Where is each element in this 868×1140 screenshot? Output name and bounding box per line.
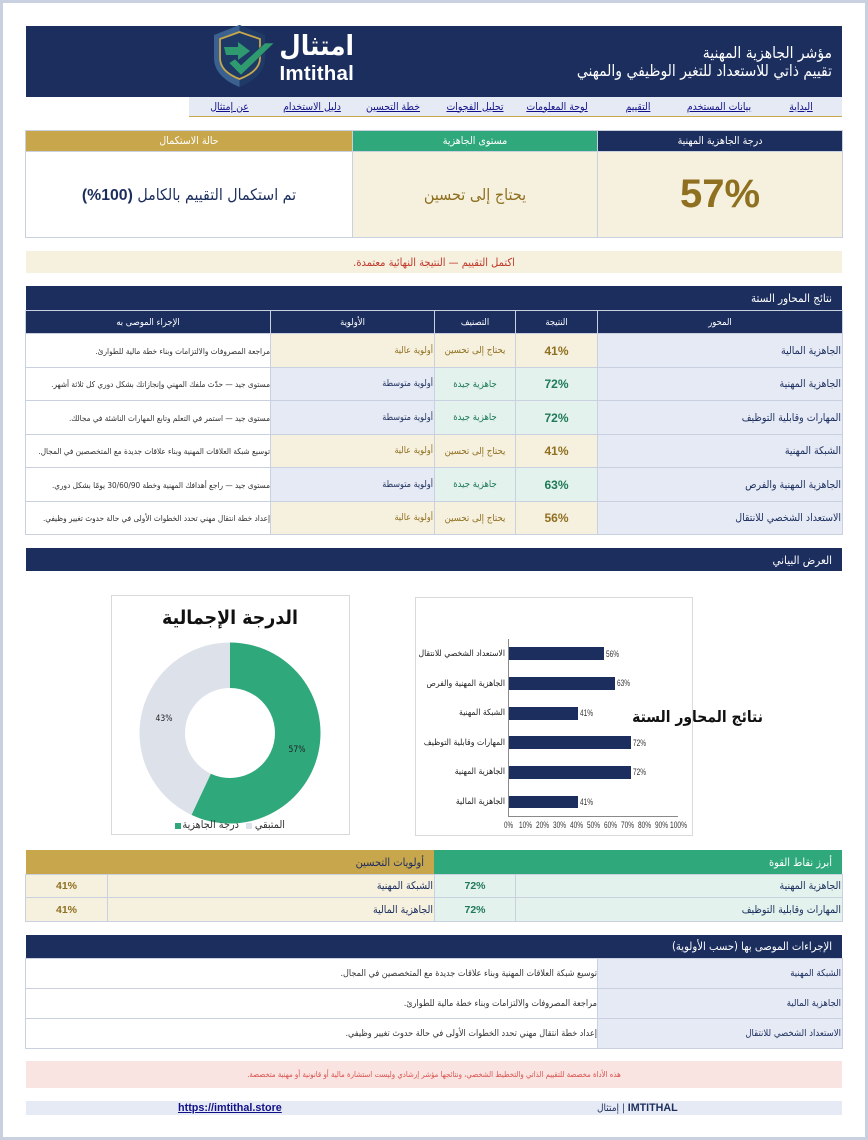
chart: six axes bar chart: 90% <box>655 820 668 830</box>
chart: six axes bar chart: 63% <box>617 678 630 688</box>
chart: six axes bar chart: 20% <box>536 820 549 830</box>
panel: improvement priorities heading: أولويات التحسين <box>356 856 424 868</box>
table: six axes results: 41% <box>544 344 569 358</box>
chart: six axes bar chart: الاستعداد الشخصي للانتقال <box>418 649 505 659</box>
table: six axes results: مراجعة المصروفات والالتزامات وبناء خطة مالية للطوارئ. <box>95 346 270 356</box>
table: six axes results: التصنيف <box>461 316 489 328</box>
panel: score summary cards: يحتاج إلى تحسين <box>424 185 526 204</box>
panel: score summary cards: مستوى الجاهزية <box>443 135 507 147</box>
navigation bar <box>189 97 842 117</box>
navigation bar: التقييم <box>626 100 650 112</box>
table: six axes results: 56% <box>544 511 569 525</box>
panel: improvement priorities heading <box>26 850 434 874</box>
heading: six axes results <box>26 286 842 310</box>
table: strengths and priorities: الجاهزية المالية <box>373 904 433 916</box>
table: six axes results: الجاهزية المالية <box>781 344 841 356</box>
heading: recommended actions <box>26 935 842 958</box>
chart: six axes bar chart: 70% <box>621 820 634 830</box>
chart: six axes bar chart: الجاهزية المهنية والفرص <box>426 679 505 689</box>
chart: six axes bar chart: الجاهزية المالية <box>456 797 505 807</box>
navigation bar: لوحة المعلومات <box>526 100 588 112</box>
table: six axes results: أولوية عالية <box>394 346 433 356</box>
table: strengths and priorities: الشبكة المهنية <box>377 880 433 892</box>
title <box>577 44 832 80</box>
chart: six axes bar chart: 40% <box>570 820 583 830</box>
table: recommended actions <box>25 958 843 1049</box>
chart: overall score donut: درجة الجاهزية <box>182 818 239 831</box>
footer: https://imtithal.store <box>178 1102 282 1114</box>
chart: six axes bar chart: الشبكة المهنية <box>459 708 505 718</box>
chart: six axes bar chart: 30% <box>553 820 566 830</box>
chart: six axes bar chart: 72% <box>633 767 646 777</box>
table: six axes results: أولوية عالية <box>394 446 433 456</box>
table: six axes results: يحتاج إلى تحسين <box>445 512 505 524</box>
table: strengths and priorities: 41% <box>56 904 77 916</box>
table: strengths and priorities <box>25 874 843 922</box>
table: six axes results: 63% <box>544 478 569 492</box>
navigation bar: خطة التحسين <box>366 100 420 112</box>
chart: overall score donut: الدرجة الإجمالية <box>162 606 298 629</box>
table: recommended actions: مراجعة المصروفات والالتزامات وبناء خطة مالية للطوارئ. <box>404 998 597 1008</box>
table: six axes results: 41% <box>544 444 569 458</box>
table: six axes results: الأولوية <box>340 316 365 328</box>
table: six axes results: مستوى جيد — حدّث ملفك المهني وإنجازاتك بشكل دوري كل ثلاثة أشهر. <box>51 379 270 389</box>
table: six axes results: أولوية متوسطة <box>382 480 433 490</box>
notice: assessment complete: اكتمل التقييم — النتيجة النهائية معتمدة. <box>353 256 515 268</box>
table: six axes results: المهارات وقابلية التوظيف <box>742 412 841 424</box>
table: six axes results: المحور <box>708 316 732 328</box>
heading: chart view: العرض البياني <box>773 552 832 566</box>
table: six axes results: يحتاج إلى تحسين <box>445 345 505 356</box>
table: recommended actions: توسيع شبكة العلاقات المهنية وبناء علاقات جديدة مع المتخصصين في المجال. <box>340 968 597 978</box>
table: six axes results: 72% <box>544 377 569 391</box>
table: recommended actions: الاستعداد الشخصي للانتقال <box>745 1028 841 1039</box>
disclaimer <box>26 1061 842 1088</box>
table: six axes results: جاهزية جيدة <box>453 378 497 390</box>
panel: score summary cards <box>25 130 843 238</box>
table: six axes results: إعداد خطة انتقال مهني تحدد الخطوات الأولى في حالة حدوث تغيير وظيفي. <box>43 513 270 523</box>
chart: six axes bar chart: 41% <box>580 708 593 718</box>
table: strengths and priorities: المهارات وقابلية التوظيف <box>742 904 841 916</box>
chart: six axes bar chart: الجاهزية المهنية <box>455 767 505 777</box>
table: recommended actions: الشبكة المهنية <box>790 968 841 979</box>
table: six axes results: الاستعداد الشخصي للانتقال <box>735 512 841 524</box>
panel: top strengths heading <box>434 850 842 874</box>
table: six axes results: توسيع شبكة العلاقات المهنية وبناء علاقات جديدة مع المتخصصين في المجال. <box>38 446 270 456</box>
table: strengths and priorities: 72% <box>464 904 486 916</box>
table: six axes results <box>25 310 843 535</box>
panel: score summary cards: درجة الجاهزية المهنية <box>678 135 762 147</box>
chart: six axes bar chart: 56% <box>606 649 619 659</box>
chart: six axes bar chart: 0% <box>504 820 513 830</box>
heading: six axes results: نتائج المحاور الستة <box>751 291 832 305</box>
table: six axes results: أولوية متوسطة <box>382 412 433 422</box>
chart: six axes bar chart: 60% <box>604 820 617 830</box>
table: six axes results: مستوى جيد — استمر في التعلم وتابع المهارات الناشئة في مجالك. <box>69 412 270 422</box>
navigation bar: بيانات المستخدم <box>687 100 751 112</box>
panel: score summary cards: تم استكمال التقييم بالكامل (100%) <box>82 184 296 204</box>
icon: shield logo <box>214 25 274 87</box>
table: six axes results: جاهزية جيدة <box>453 479 497 490</box>
table: six axes results: الجاهزية المهنية والفرص <box>745 478 841 490</box>
table: six axes results: 72% <box>544 410 569 424</box>
chart: overall score donut: المتبقي <box>255 818 285 831</box>
navigation bar: عن إمتثال <box>210 100 249 112</box>
table: strengths and priorities: 41% <box>56 880 77 892</box>
table: six axes results: الإجراء الموصى به <box>116 316 180 328</box>
chart: six axes bar chart: 100% <box>670 820 687 830</box>
chart: six axes bar chart: 50% <box>587 820 600 830</box>
table: six axes results: جاهزية جيدة <box>453 412 497 423</box>
chart: six axes bar chart: 10% <box>519 820 532 830</box>
chart: overall score donut: 43% <box>156 714 172 724</box>
chart: six axes bar chart <box>415 597 763 836</box>
panel: top strengths heading: أبرز نقاط القوة <box>769 856 832 868</box>
logo wordmark: امتثال <box>279 30 354 62</box>
footer <box>26 1101 842 1115</box>
chart: six axes bar chart: 80% <box>638 820 651 830</box>
chart: overall score donut: 57% <box>288 745 306 755</box>
panel: score summary cards: 57% <box>680 172 760 216</box>
heading: chart view <box>26 548 842 571</box>
heading: recommended actions: الإجراءات الموصى بها (حسب الأولوية) <box>672 940 832 953</box>
logo wordmark: Imtithal <box>280 62 354 85</box>
notice: assessment complete <box>26 251 842 273</box>
table: six axes results: الشبكة المهنية <box>785 445 841 457</box>
disclaimer: هذه الأداة مخصصة للتقييم الذاتي والتخطيط الشخصي، ونتائجها مؤشر إرشادي وليست استشارة مالية أو قانونية أو مهنية متخصصة. <box>247 1070 621 1079</box>
chart: six axes bar chart: المهارات وقابلية التوظيف <box>424 738 505 748</box>
navigation bar: البداية <box>789 100 813 112</box>
table: six axes results: أولوية متوسطة <box>382 379 433 389</box>
footer: IMTITHAL <box>628 1102 678 1114</box>
chart: six axes bar chart: نتائج المحاور الستة <box>632 708 763 726</box>
logo wordmark <box>279 30 354 85</box>
navigation bar: دليل الاستخدام <box>283 100 341 112</box>
title: تقييم ذاتي للاستعداد للتغير الوظيفي والمهني <box>577 62 832 80</box>
header banner <box>26 26 842 97</box>
table: recommended actions: الجاهزية المالية <box>787 998 841 1009</box>
table: six axes results: مستوى جيد — راجع أهدافك المهنية وخطة 30/60/90 يومًا بشكل دوري. <box>52 480 270 490</box>
footer: | إمتثال <box>597 1102 625 1114</box>
table: six axes results: الجاهزية المهنية <box>780 378 841 390</box>
table: six axes results: أولوية عالية <box>394 513 433 523</box>
title: مؤشر الجاهزية المهنية <box>703 44 832 62</box>
chart: overall score donut <box>111 595 350 835</box>
table: six axes results: النتيجة <box>545 316 568 328</box>
table: recommended actions: إعداد خطة انتقال مهني تحدد الخطوات الأولى في حالة حدوث تغيير وظيفي. <box>345 1028 597 1038</box>
navigation bar: تحليل الفجوات <box>446 100 504 112</box>
table: strengths and priorities: 72% <box>464 880 486 892</box>
chart: six axes bar chart: 72% <box>633 738 646 748</box>
table: six axes results: يحتاج إلى تحسين <box>445 446 505 456</box>
chart: six axes bar chart: 41% <box>580 797 593 807</box>
panel: score summary cards: حالة الاستكمال <box>159 135 219 147</box>
table: strengths and priorities: الجاهزية المهنية <box>780 880 841 892</box>
